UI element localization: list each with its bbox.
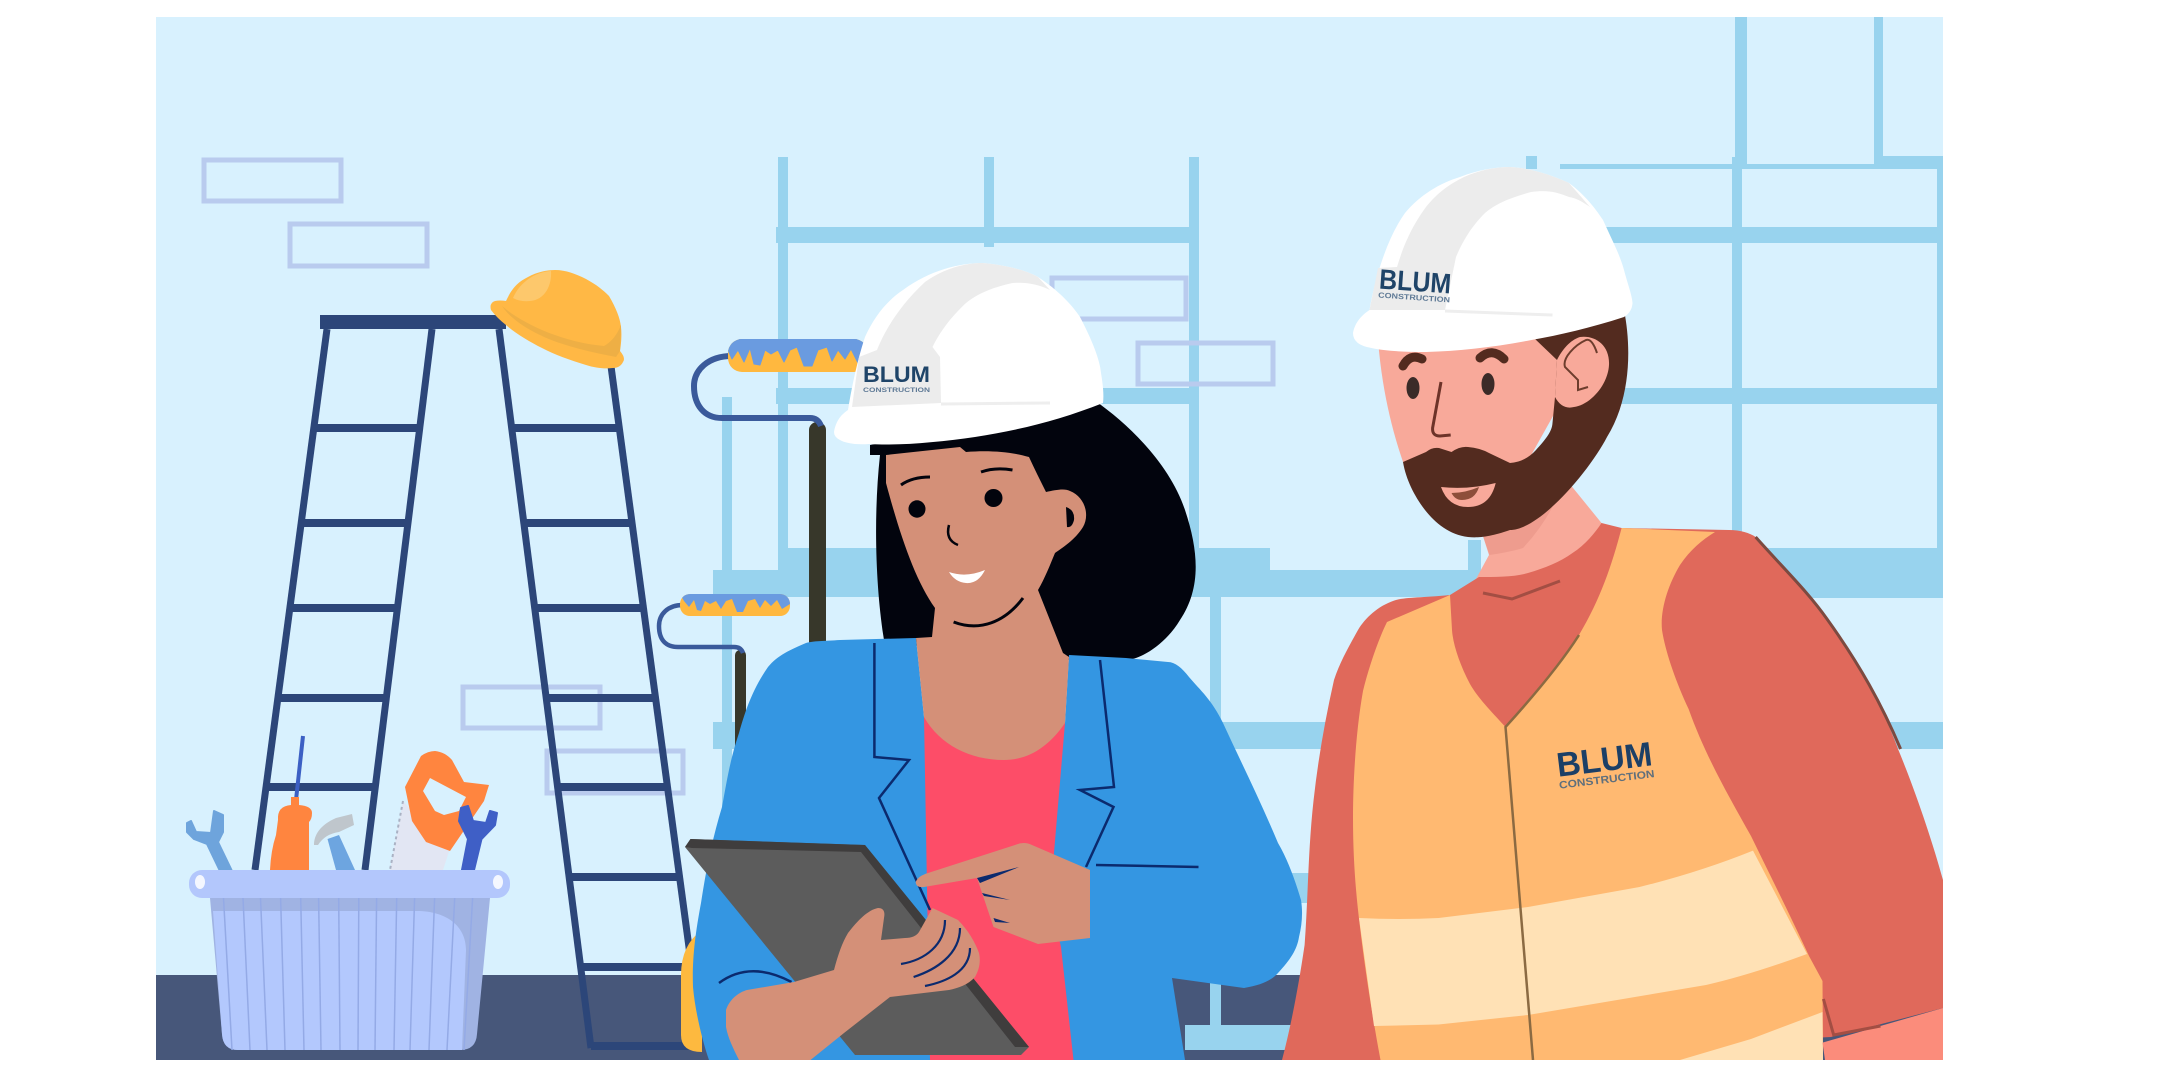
collar line (1483, 581, 1560, 599)
hand holding tablet (726, 908, 980, 1060)
red shirt (1282, 523, 1943, 1060)
background wall (156, 17, 1943, 1060)
blazer (693, 638, 1302, 1060)
woman white hard hat (834, 263, 1103, 445)
character: man in safety vest (1282, 167, 1943, 1060)
man white hard hat: CONSTRUCTION (1378, 290, 1450, 304)
woman white hard hat: BLUM (863, 362, 930, 387)
vest logo: CONSTRUCTION (1558, 768, 1655, 792)
woman white hard hat: CONSTRUCTION (863, 387, 930, 394)
man white hard hat: BLUM (1378, 264, 1452, 299)
man white hard hat (1353, 167, 1632, 352)
hair (870, 400, 1196, 660)
illustration: construction site scene (156, 17, 1943, 1060)
tool: light blue wrench (187, 811, 232, 870)
wall bricks outlines (204, 160, 1273, 793)
face and neck (886, 447, 1086, 760)
paint roller: small (656, 594, 790, 746)
blazer lapel lines (719, 643, 1198, 983)
tool: hammer (314, 814, 355, 870)
scaffold: right frame (1526, 17, 1943, 598)
beard and hair (1403, 310, 1628, 537)
tool bucket (189, 870, 510, 1050)
tablet (685, 839, 1029, 1055)
scaffold: centre frame (713, 157, 1943, 1050)
step ladder (255, 315, 694, 1048)
eyes and brows (1403, 353, 1504, 436)
vest logo: BLUM (1554, 735, 1654, 785)
ear (1555, 337, 1609, 408)
yellow paint can behind woman (681, 930, 702, 1052)
tool: screwdriver (270, 736, 312, 870)
facial features (901, 469, 1074, 626)
neck shadow (1481, 507, 1552, 555)
face (1378, 339, 1557, 463)
pointing hand (916, 843, 1090, 944)
paint roller: large (691, 339, 864, 642)
tool: dark blue wrench (459, 806, 497, 870)
shirt (924, 717, 1074, 1060)
floor (156, 975, 1943, 1060)
safety vest (1353, 528, 1823, 1060)
neck (1476, 486, 1602, 579)
vest reflective stripes (1359, 851, 1823, 1060)
sleeve shadow outline (1756, 537, 1901, 749)
vest zipper (1506, 635, 1579, 1060)
icon: yellow hard hat on ladder (490, 270, 624, 368)
character: woman in blue blazer (685, 263, 1302, 1060)
hand and cuff (1822, 999, 1943, 1060)
mouth (1441, 483, 1496, 507)
tool: hand saw (390, 751, 489, 870)
